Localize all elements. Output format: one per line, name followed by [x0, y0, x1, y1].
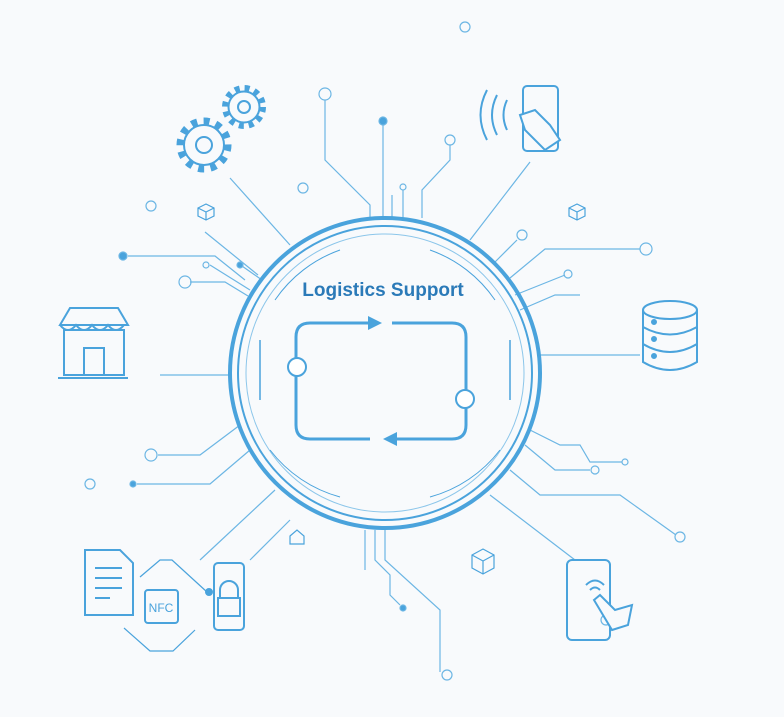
icon: NFC group: [85, 550, 244, 651]
icon: NFC group: NFC: [149, 601, 174, 615]
icons: cubes: [198, 204, 585, 574]
central circle: [230, 218, 540, 528]
icon: phone tap: [480, 86, 560, 151]
icon: gears: [180, 88, 263, 169]
icon: database: [643, 301, 697, 370]
title: Logistics Support: [302, 280, 464, 301]
loop arrows: [288, 316, 474, 446]
icon: store: [58, 308, 128, 378]
icon: phone touch: [567, 560, 632, 640]
